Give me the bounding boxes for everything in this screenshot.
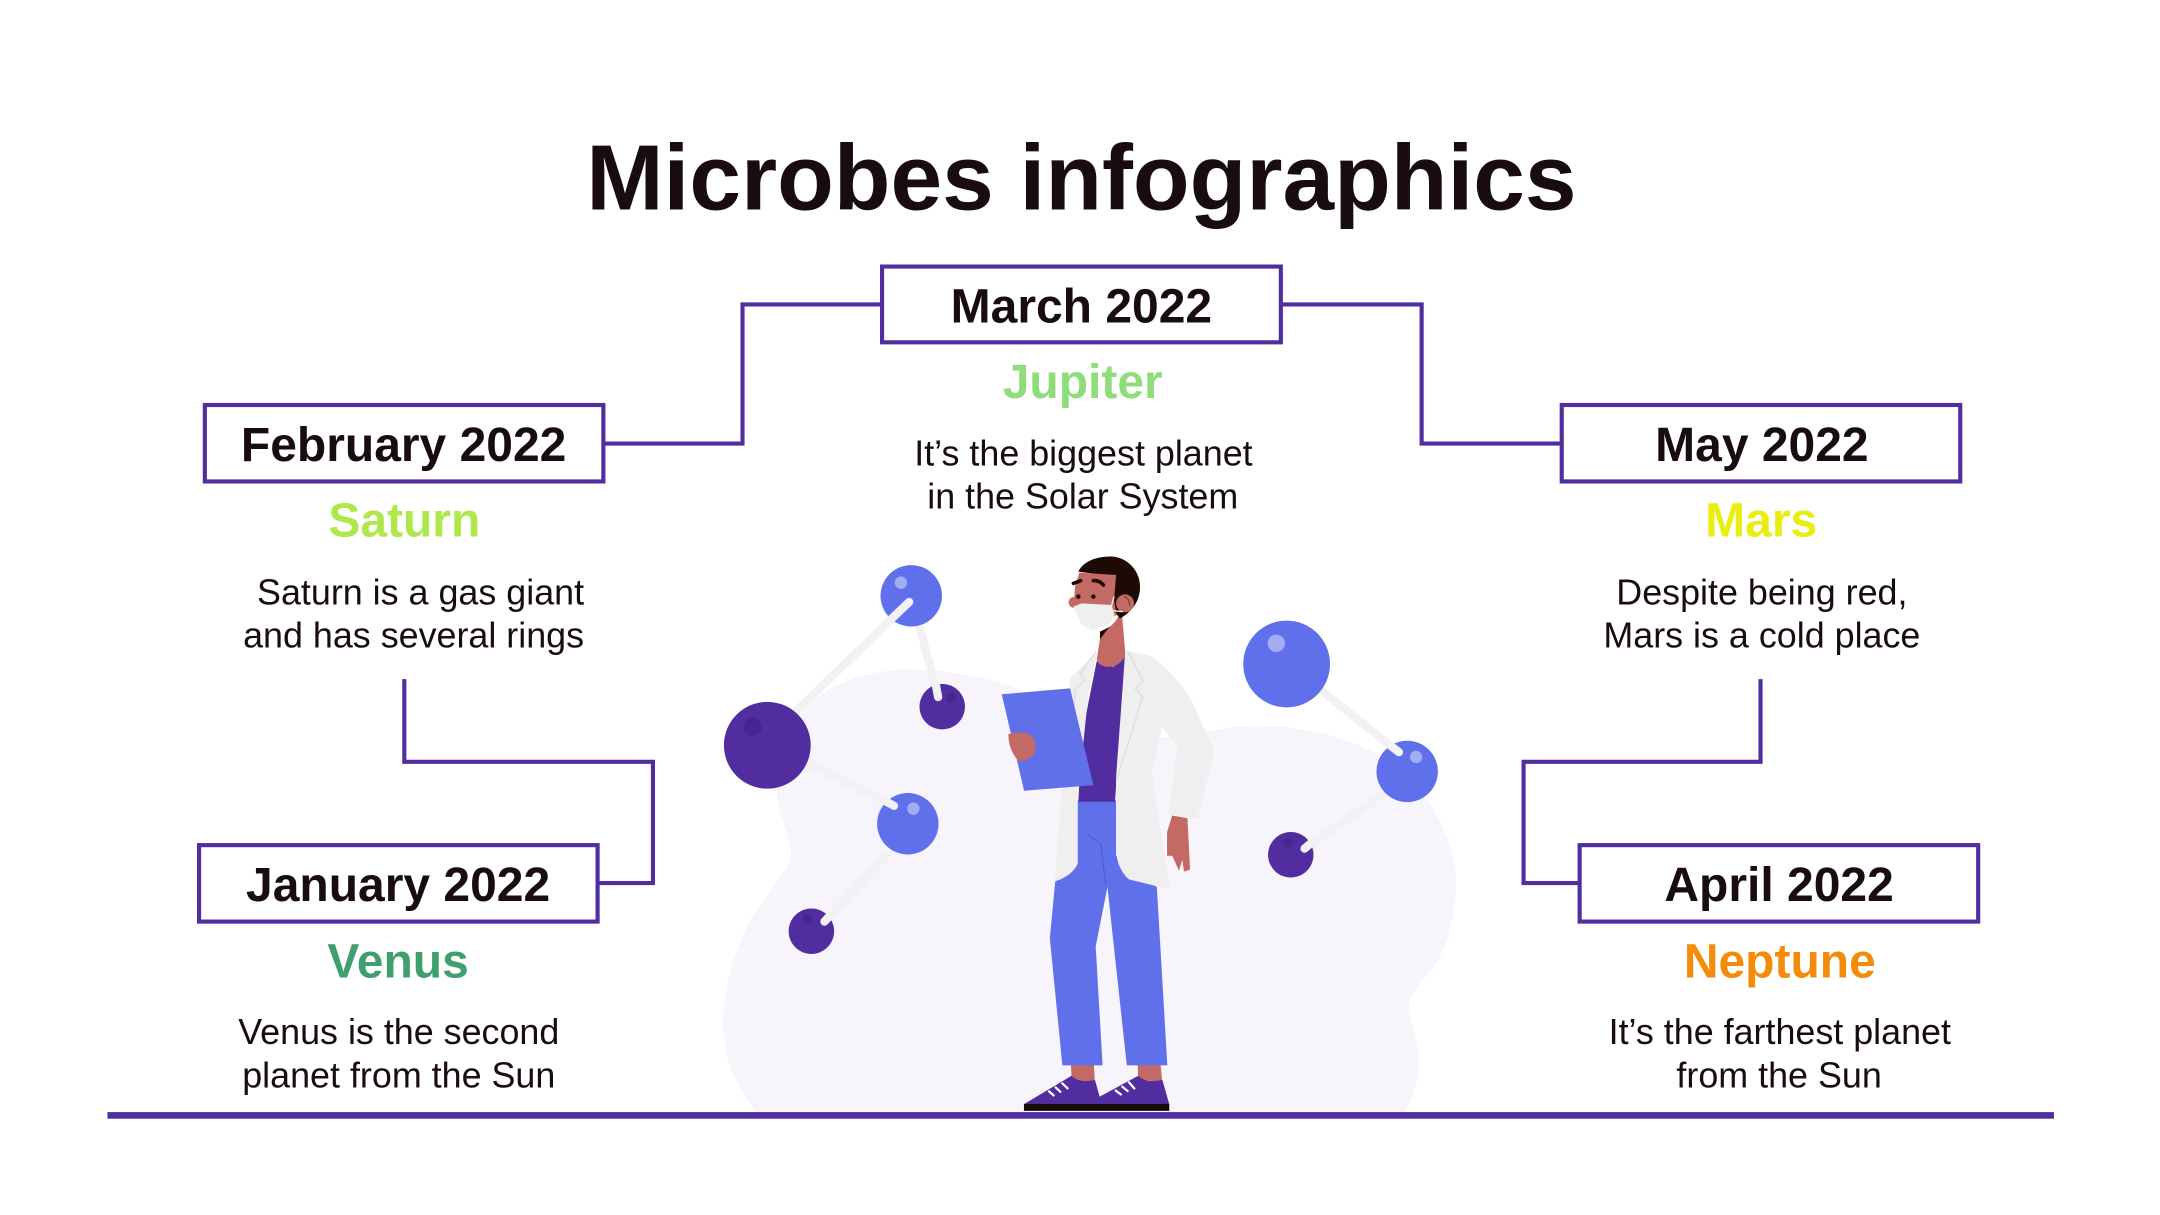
trousers xyxy=(1050,800,1167,1065)
connector: March to May xyxy=(1281,304,1561,444)
title: Microbes infographics xyxy=(586,125,1577,229)
ankles xyxy=(1071,1065,1162,1084)
panel: January / Venus: planet from the Sun xyxy=(242,1056,555,1096)
panel: January / Venus: January 2022 xyxy=(246,859,550,912)
panel: January / Venus: Venus is the second xyxy=(238,1012,559,1052)
panel: February / Saturn: and has several rings xyxy=(243,615,584,655)
panel: April / Neptune: from the Sun xyxy=(1676,1056,1882,1096)
molecule sticks under spheres xyxy=(796,602,1399,922)
connector: Saturn to January xyxy=(404,679,653,883)
connector: February to March xyxy=(603,304,882,444)
panel: January / Venus xyxy=(199,845,598,1096)
panel: May / Mars: Despite being red, xyxy=(1616,573,1907,613)
panel: February / Saturn: Saturn xyxy=(328,495,480,548)
mask xyxy=(1073,603,1115,631)
panel: January / Venus: Venus xyxy=(327,935,469,988)
panel: May / Mars xyxy=(1562,405,1960,655)
panel: February / Saturn: Saturn is a gas giant xyxy=(257,573,584,613)
molecule spheres xyxy=(724,565,1438,954)
panel: March / Jupiter: It’s the biggest planet xyxy=(914,434,1253,474)
shoes xyxy=(1024,1076,1169,1111)
person xyxy=(1002,557,1215,1111)
head xyxy=(1069,557,1140,631)
panel: April / Neptune: Neptune xyxy=(1684,935,1876,988)
panel: May / Mars: Mars xyxy=(1705,495,1817,548)
background blob xyxy=(723,669,1456,1113)
panel: February / Saturn xyxy=(205,405,603,655)
right hand xyxy=(1167,816,1190,872)
panel: May / Mars: May 2022 xyxy=(1655,419,1869,472)
neck and beard xyxy=(1097,612,1125,667)
panel: April / Neptune xyxy=(1580,845,1978,1096)
baseline rule xyxy=(107,1112,2054,1119)
panel: March / Jupiter xyxy=(882,267,1281,516)
illustration: scientist and molecules xyxy=(723,557,1456,1113)
panel: March / Jupiter: Jupiter xyxy=(1003,356,1163,409)
panel: April / Neptune: April 2022 xyxy=(1664,859,1894,912)
panel: April / Neptune: It’s the farthest planet xyxy=(1609,1012,1951,1052)
panel: February / Saturn: February 2022 xyxy=(241,419,566,472)
connector: Mars to April xyxy=(1524,679,1761,883)
lab coat xyxy=(1055,650,1215,889)
clipboard xyxy=(1002,688,1093,791)
panel: May / Mars: Mars is a cold place xyxy=(1603,615,1920,655)
panel: March / Jupiter: in the Solar System xyxy=(927,476,1238,516)
shirt xyxy=(1078,657,1125,802)
molecule stick tips over spheres xyxy=(824,602,1399,922)
panel: March / Jupiter: March 2022 xyxy=(951,280,1212,333)
left hand xyxy=(1008,732,1036,761)
